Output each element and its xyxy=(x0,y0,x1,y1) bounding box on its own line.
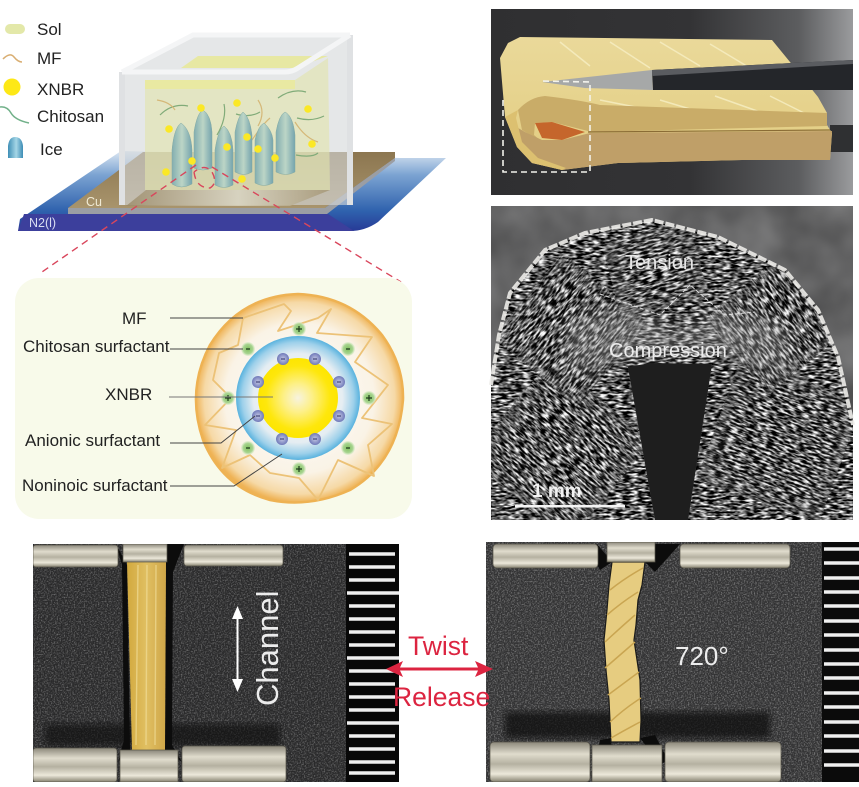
twisted yellow fibre xyxy=(604,562,645,742)
ice crystals xyxy=(172,110,295,188)
panel: latex particle detail xyxy=(15,278,412,519)
detail labels: Chitosan surfactant xyxy=(23,337,170,356)
straight yellow fibre xyxy=(127,562,166,750)
tweezers xyxy=(542,70,653,90)
porous lamellar structure xyxy=(491,220,853,520)
freeze-casting schematic xyxy=(18,35,446,282)
leader lines xyxy=(169,318,282,486)
double-headed red arrow xyxy=(386,661,493,677)
rounded yellow fold edge xyxy=(505,110,566,170)
central cavity xyxy=(628,363,712,520)
legend xyxy=(0,20,104,159)
neutral-axis dashed line xyxy=(600,285,755,315)
dashed crop box xyxy=(503,81,590,172)
sheet surface streaks xyxy=(560,42,806,114)
metal clamps xyxy=(490,542,790,782)
photo: SEM cross-section: 1 mm xyxy=(532,481,582,502)
container box xyxy=(122,35,350,206)
scale bar xyxy=(515,505,625,508)
copper plate: Cu xyxy=(86,195,102,209)
anionic surfactant markers xyxy=(252,353,345,445)
lower limb of the fold xyxy=(513,125,832,170)
720 degree label: 720° xyxy=(675,641,729,671)
upper limb of the fold xyxy=(518,96,827,142)
legend item: Ice: Ice xyxy=(40,140,63,159)
MF wavy network xyxy=(205,304,392,500)
liquid nitrogen tray xyxy=(18,151,446,231)
gaps beside the fibre xyxy=(590,544,680,765)
legend item: MF: MF xyxy=(37,49,62,68)
detail labels: Anionic surfactant xyxy=(25,431,160,450)
photo: untwisted fibre in clamps xyxy=(33,544,399,782)
detail labels: MF xyxy=(122,309,147,328)
Channel label: Channel xyxy=(250,591,285,706)
outer MF shell xyxy=(196,294,403,502)
yellow XNBR core xyxy=(258,358,338,438)
N2 label: N2(l) xyxy=(29,216,56,230)
ruler xyxy=(822,542,859,782)
twist and release annotation xyxy=(386,631,493,712)
copper plate xyxy=(68,152,395,214)
legend item: Sol: Sol xyxy=(37,20,62,39)
fold cavity xyxy=(535,122,585,140)
clamp shadow xyxy=(45,724,280,746)
blue noninoic layer xyxy=(236,336,360,460)
photo: SEM cross-section xyxy=(489,206,855,520)
metal clamps xyxy=(33,544,286,782)
photo: twisted fibre in clamps xyxy=(486,542,859,782)
XNBR particles xyxy=(162,99,316,183)
legend item: XNBR: XNBR xyxy=(37,80,84,99)
photo: folded aerogel held by tweezers xyxy=(491,9,853,195)
clamp shadow xyxy=(505,712,770,738)
chitosan surfactant markers xyxy=(221,322,376,476)
chitosan and MF strands xyxy=(157,91,324,156)
gaps beside the fibre xyxy=(116,544,184,762)
ruler xyxy=(346,544,399,782)
bright outer edge xyxy=(491,220,853,425)
detail labels: Noninoic surfactant xyxy=(22,476,168,495)
legend item: Chitosan: Chitosan xyxy=(37,107,104,126)
Twist label: Twist xyxy=(408,631,469,661)
detail labels xyxy=(22,309,170,495)
SEM labels: Tension xyxy=(625,252,694,274)
Release label: Release xyxy=(393,682,490,712)
channel direction arrow xyxy=(232,606,243,692)
detail labels: XNBR xyxy=(105,385,152,404)
photo: SEM cross-section: Compression xyxy=(609,340,727,362)
zoom indicator dashed lines xyxy=(42,165,401,282)
tweezer lower tip xyxy=(830,125,853,152)
yellow folded sheet xyxy=(500,37,832,170)
